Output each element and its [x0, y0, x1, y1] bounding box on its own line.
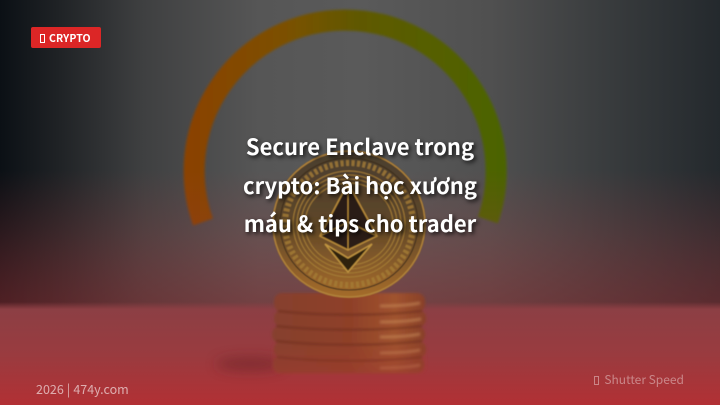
coin stack [272, 293, 426, 374]
ethereum coin [272, 150, 426, 298]
red wash over wall [0, 170, 720, 312]
photo credit: Shutter Speed [604, 371, 684, 388]
stack shadow [216, 357, 284, 371]
category badge: CRYPTO [49, 31, 91, 46]
title [243, 130, 480, 239]
gauge arc [194, 20, 496, 222]
title: máu & tips cho trader [244, 207, 476, 239]
ethereum diamond [320, 183, 377, 272]
wall [0, 0, 720, 312]
title: crypto: Bài học xương [243, 168, 477, 200]
table surface [0, 302, 720, 405]
category badge [31, 27, 101, 48]
title: Secure Enclave trong [246, 130, 474, 162]
date and site: 2026 | 474y.com [36, 379, 129, 398]
